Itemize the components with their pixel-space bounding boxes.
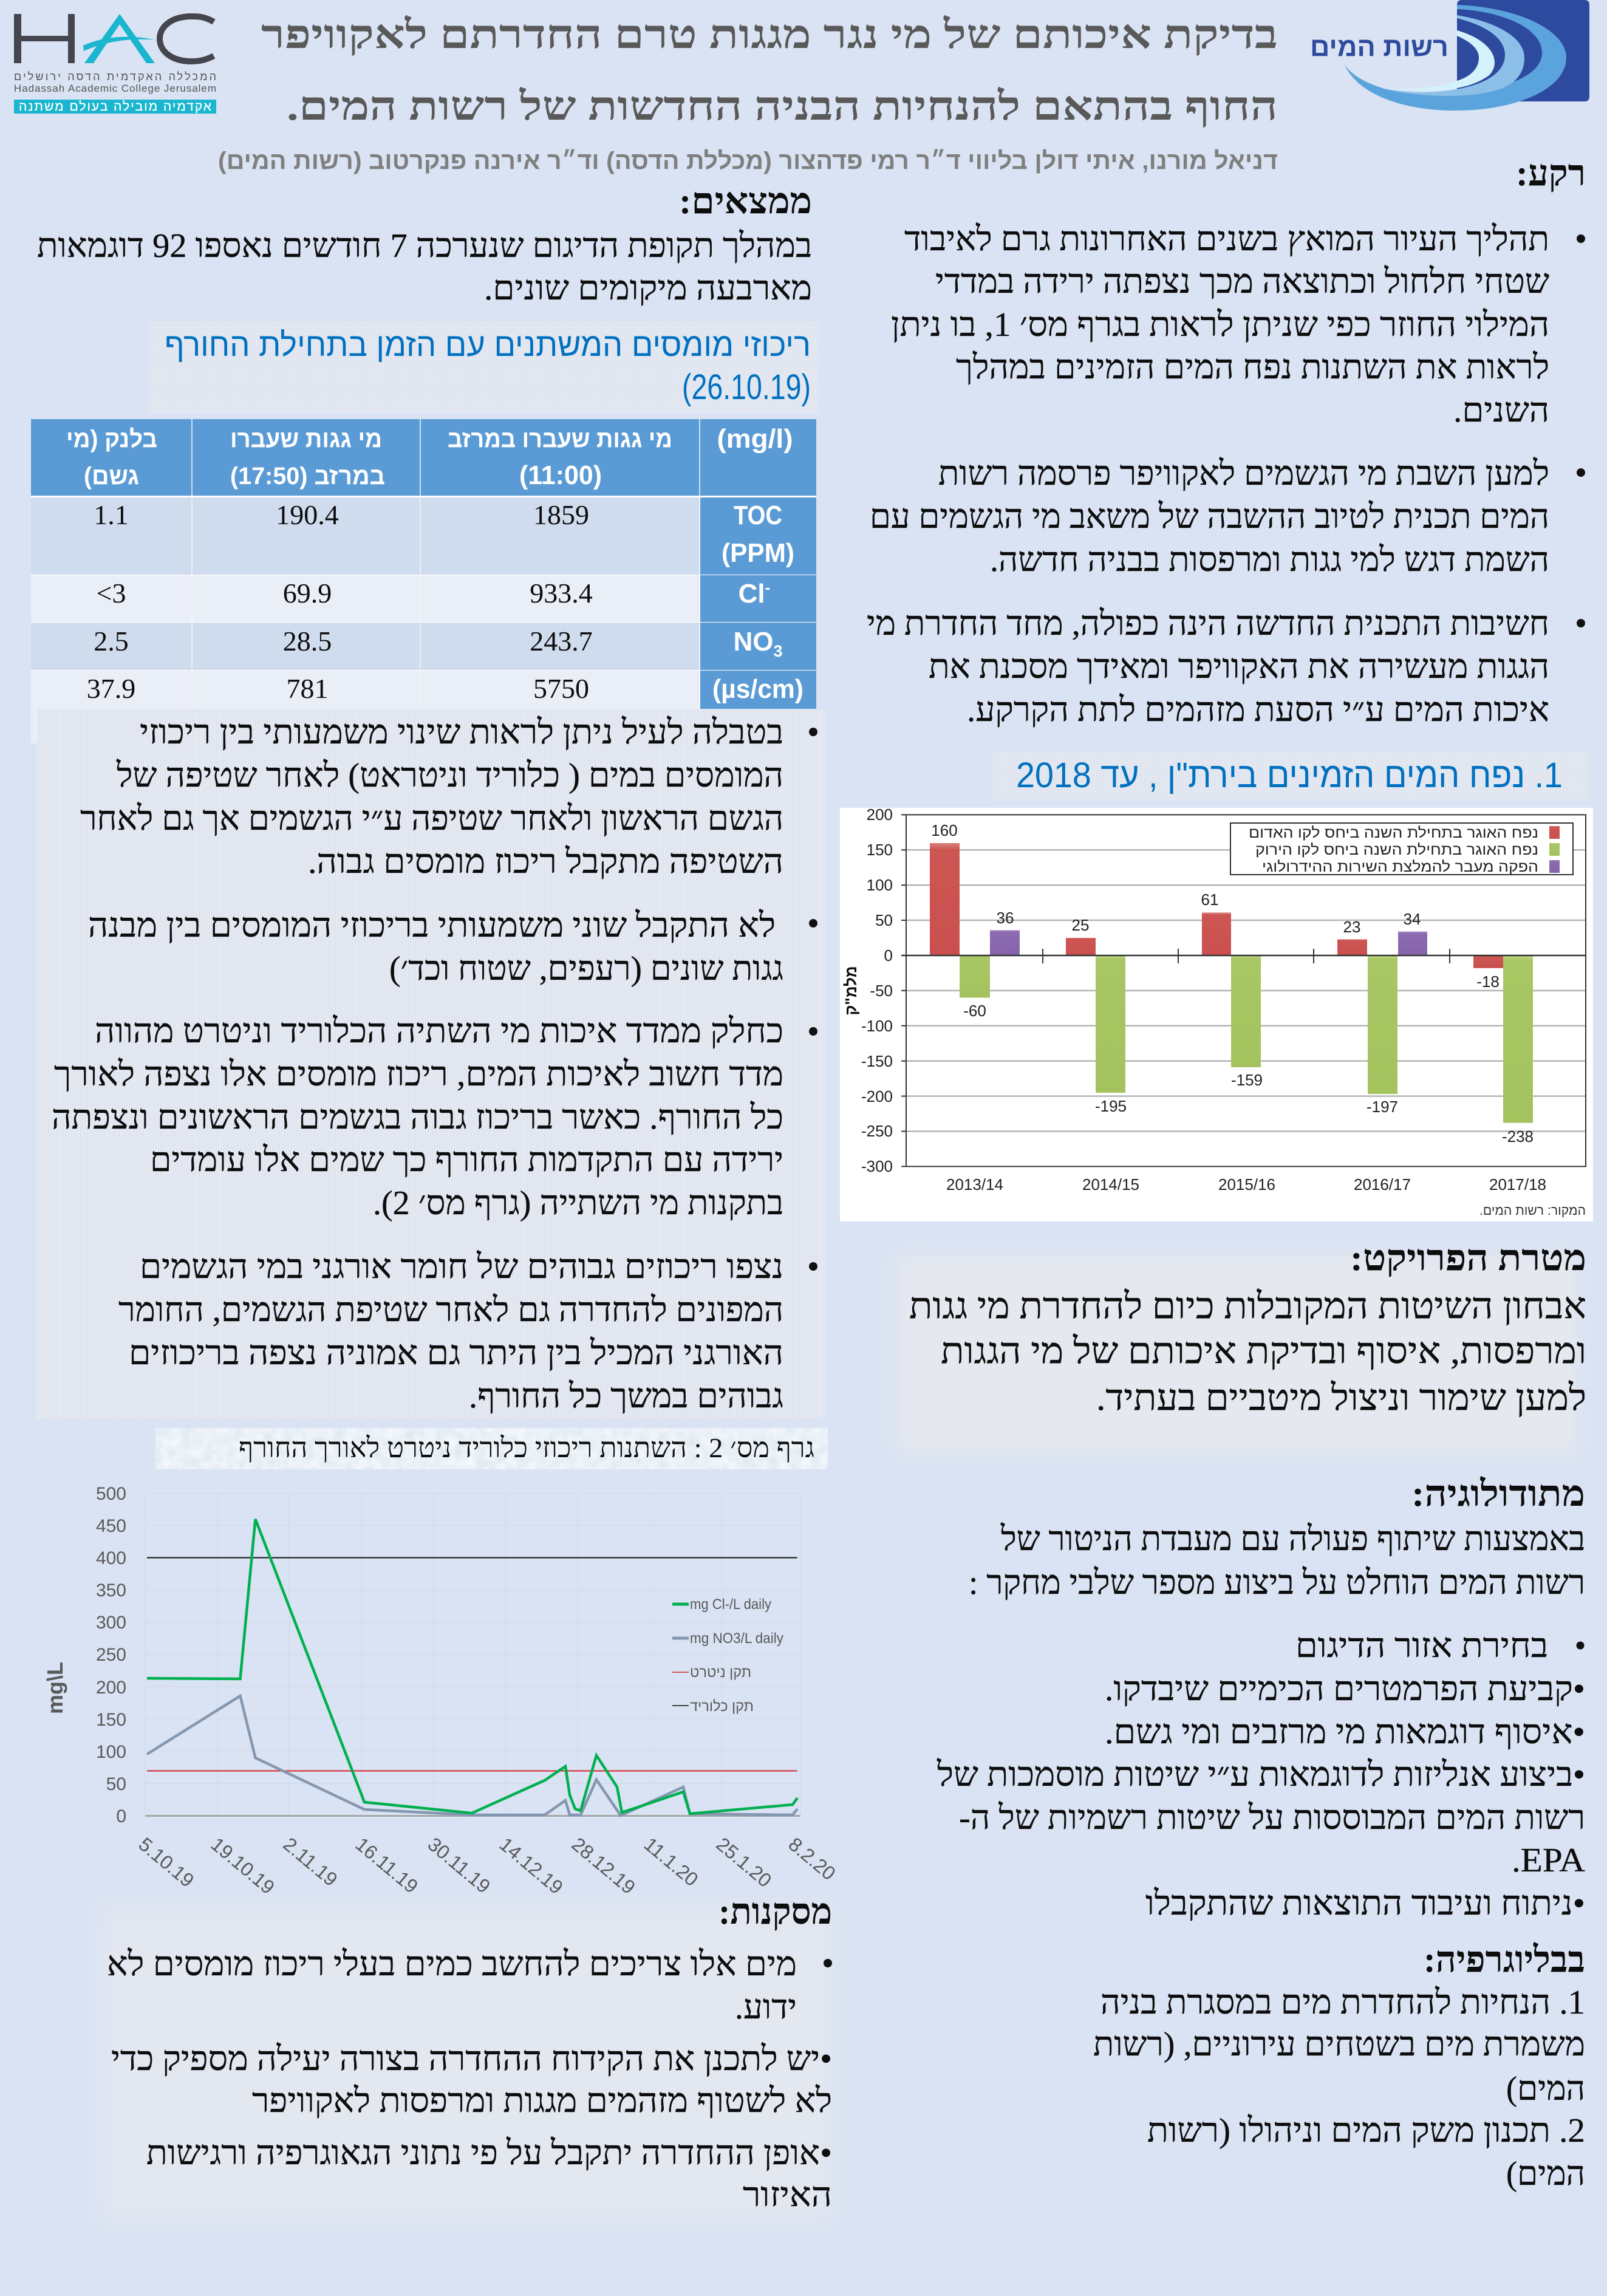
data labels [931,821,1534,1146]
bullet text 3: הגגות מעשירה את האקוויפר ומאידך מסכנת את [929,648,1549,686]
list: methodology steps [937,1627,1586,1922]
y axis labels: 100 [96,1742,126,1762]
conclusion 1 [107,1946,832,2026]
table values: 781 [287,673,328,704]
logo: HAC college: Hadassah Academic College Jerusalem [14,83,216,94]
heading: bibliography: בבליוגרפיה: [1424,1939,1585,1980]
data labels: 160 [931,821,958,839]
table header: (11:00) [519,460,602,490]
panel: chart 2 heading [155,1428,828,1469]
line: nitrate [147,1696,797,1816]
bullet text 3 [52,1013,817,1222]
data labels: 23 [1343,918,1360,936]
y axis title: מלמ"ק [842,966,860,1016]
text: findings intro: מארבעה מיקומים שונים. [484,270,812,307]
table row labels: TOC [734,501,782,530]
line: nitrate standard [147,1770,797,1771]
table header: בלנק (מי [66,426,157,453]
bullet text 2 [870,455,1585,579]
conclusion 2 [111,2040,832,2120]
y axis labels: 200 [96,1678,126,1698]
y axis labels: 450 [96,1516,126,1536]
table values: 190.4 [276,499,339,530]
legend: הפקה מעבר להמלצת השירות ההידרולוגי [1262,859,1538,875]
conclusion 3: האיזור [743,2176,832,2214]
table header: מי גגות שעברו [230,426,382,453]
category labels: 2015/16 [1218,1175,1275,1194]
bullet text 2: לא התקבל שוני משמעותי בריכוזי המומסים בין מבנה [88,907,776,945]
y axis labels: -50 [870,982,893,1000]
y axis labels: 400 [96,1548,126,1568]
logo: HAC college: המכללה האקדמית הדסה ירושלים [14,70,216,83]
y axis labels: 300 [96,1613,126,1633]
table values: 28.5 [283,626,332,657]
bullet text 4: גבוהים במשך כל החורף. [469,1378,783,1415]
bullet text 2 [88,907,817,988]
y axis labels: 150 [867,841,893,859]
panel: methodology [937,1474,1586,1922]
y axis labels: 50 [106,1774,126,1794]
x axis labels: 8.2.20 [785,1833,840,1885]
table values: 69.9 [283,578,332,609]
table values [87,499,593,704]
bullet text 2: השמת דגש למי גגות ומרפסות בבניה חדשה. [990,541,1549,579]
list: methodology steps: •קביעת הפרמטרים הכימיים שיבדקו. [1105,1670,1585,1708]
y axis labels: 250 [96,1645,126,1665]
table: dissolved concentrations [31,419,816,743]
y axis labels: 100 [867,876,893,894]
panel: findings bullets [37,709,825,1419]
bullet text 2: גגות שונים (רעפים, שטוח וכד׳) [389,950,783,988]
y axis labels: 500 [96,1484,126,1504]
list: methodology steps: •איסוף דוגמאות מי מרזבים ומי גשם. [1105,1713,1585,1751]
y axis labels: 0 [116,1806,126,1826]
text: references: 2. תכנון משק המים וניהולו (רשות [1147,2112,1585,2150]
source note: המקור: רשות המים. [1479,1203,1586,1218]
heading: project goal: מטרת הפרויקט: [1350,1238,1586,1278]
text: references: 1. הנחיות להחדרת מים במסגרת בניה [1100,1984,1585,2021]
conclusion 3: •אופן ההחדרה יתקבל על פי נתוני הגאוגרפיה ורגישות [146,2134,832,2172]
bars [930,843,1533,1123]
category labels: 2014/15 [1082,1175,1139,1194]
bullet text 3: כל החורף. כאשר בריכוז גבוה בגשמים הראשונים ונצפתה [52,1099,783,1136]
legend: תקן ניטרט [690,1664,751,1681]
conclusion 2: •יש לתכנן את הקידוח ההחדרה בצורה יעילה מספיק כדי [111,2040,832,2078]
table header: (mg/l) [717,424,793,454]
legend: נפח האוגר בתחילת השנה ביחס לקו האדום [1249,825,1538,841]
legend: נפח האוגר בתחילת השנה ביחס לקו הירוק [1255,842,1538,858]
list: methodology steps: •ביצוע אנליזות לדוגמאות ע״י שיטות מוסמכות של [937,1756,1585,1794]
table row labels [712,501,803,704]
heading: methodology: מתודולוגיה: [1411,1474,1585,1514]
legend: mg NO3/L daily [690,1630,783,1647]
panel: conclusions [100,1891,832,2221]
text: findings intro [37,227,812,307]
text: references [1093,1984,1585,2193]
legend [672,1596,783,1715]
logo: water authority: רשות המים [1310,32,1448,62]
panel: table heading: ריכוזי מומסים המשתנים עם הזמן בתחילת החורף [165,327,811,363]
y axis labels: 350 [96,1580,126,1601]
title: בדיקת איכותם של מי נגר מגגות טרם החדרתם לאקוויפר [261,13,1278,57]
data labels: -195 [1095,1097,1127,1115]
x axis labels: 30.11.19 [424,1833,494,1898]
logo: HAC college: אקדמיה מובילה בעולם משתנה [19,100,211,114]
text: project goal: אבחון השיטות המקובלות כיום להחדרת מי גגות [909,1286,1586,1326]
text: project goal [909,1286,1586,1418]
bullet text 3: מדד חשוב לאיכות המים, ריכוז מומסים אלו נצפה לאורך [54,1056,783,1093]
panel: table heading: (26.10.19) [682,367,811,407]
y axis labels: 50 [875,911,893,929]
bullet text 1: המומסים במים ( כלוריד וניטראט) לאחר שטיפה של [116,757,783,794]
panel: project goal [896,1238,1586,1453]
bullet text 4: המפונים להחדרה גם לאחר שטיפת הגשמים, החומר [118,1291,783,1329]
text: methodology intro [969,1520,1585,1602]
bullet text 1: לראות את השתנות נפח המים הזמינים במהלך [956,349,1549,386]
bullet text 1 [80,714,817,881]
category labels [946,1175,1546,1194]
text: project goal: ומרפסות, איסוף ובדיקת איכותם של מי הגגות [941,1331,1586,1371]
data labels: -238 [1502,1127,1534,1146]
x axis labels: 14.12.19 [496,1833,567,1898]
bullet text 1: השטיפה מתקבל ריכוז מומסים גבוה. [308,843,783,881]
bullet text 1: השנים. [1453,392,1549,429]
logo: HAC college [14,14,216,114]
table row labels: NO [733,627,773,657]
text: references: המים) [1506,2070,1585,2108]
title: החוף בהתאם להנחיות הבניה החדשות של רשות המים. [287,84,1278,129]
list: methodology steps: EPA. [1512,1842,1586,1879]
title [261,13,1278,129]
bullet text 1: שטחי חלחול וכתוצאה מכך נצפתה ירידה במדדי [935,263,1549,301]
heading: findings: ממצאים: [679,181,812,221]
bullet text 2: למען השבת מי הגשמים לאקוויפר פרסמה רשות [938,455,1549,493]
data labels: -197 [1366,1098,1398,1116]
y axis title: mg\L [43,1662,67,1714]
list: methodology steps: •ניתוח ועיבוד התוצאות שהתקבלו [1145,1885,1585,1922]
legend: תקן כלוריד [690,1698,754,1715]
table values: 5750 [533,673,589,704]
table values: 1859 [533,499,589,530]
data labels: 25 [1072,916,1089,934]
table row labels: Cl [739,579,765,609]
panel: table heading [149,321,819,413]
table values: 37.9 [87,673,135,704]
panel: bibliography [1093,1939,1585,2193]
y axis labels [96,1484,126,1826]
conclusion 1: ידוע. [735,1989,797,2026]
line: chloride [147,1519,797,1814]
panel: background (רקע) [867,153,1586,729]
table values: 1.1 [94,499,129,530]
text: references: המים) [1506,2155,1585,2193]
list: methodology steps: רשות המים המבוססות על שיטות רשמיות של ה- [959,1799,1585,1837]
x axis labels: 19.10.19 [207,1833,279,1898]
legend [1230,823,1573,875]
table values: 243.7 [530,626,593,657]
table header [66,424,793,490]
bullet text 3 [867,605,1585,729]
x axis labels: 25.1.20 [712,1833,776,1891]
heading: background: רקע: [1516,153,1586,193]
y axis labels: -250 [861,1122,893,1140]
table header: גשם) [84,463,139,490]
panel: chart 1 heading: 1. נפח המים הזמינים בירת"ן , עד 2018 [1016,756,1563,795]
table values: <3 [97,578,126,609]
y axis labels [861,805,893,1175]
category labels: 2017/18 [1489,1175,1546,1194]
bullet text 2: המים תכנית לטיוב ההשבה של משאב מי הגשמים עם [870,498,1549,536]
x axis labels: 16.11.19 [352,1833,422,1898]
bullet text 3: חשיבות התכנית החדשה הינה כפולה, מחד החדרת מי [867,605,1549,643]
bar chart: available water volume [840,805,1593,1221]
y axis labels: 200 [867,805,893,824]
category labels: 2016/17 [1354,1175,1411,1194]
conclusion 2: לא לשטוף מזהמים מגגות ומרפסות לאקוויפר [252,2082,832,2120]
conclusion 1: מים אלו צריכים להחשב כמים בעלי ריכוז מומסים לא [107,1946,797,1983]
table row labels: (PPM) [722,538,794,568]
bullet text 4: האורגני המכיל בין היתר גם אמוניה נצפה בריכוזים [129,1334,783,1372]
table values: 933.4 [530,578,593,609]
bullet text 3: איכות המים ע״י הסעת מזהמים לתת הקרקע. [967,691,1549,729]
table header: במרזב (17:50) [230,463,385,490]
text: project goal: למען שימור וניצול מיטביים בעתיד. [1096,1378,1586,1418]
x axis labels: 28.12.19 [568,1833,640,1898]
bullet text 3: בתקנות מי השתייה (גרף מס׳ 2). [373,1184,783,1222]
heading: conclusions: מסקנות: [718,1891,832,1932]
data labels: 61 [1201,890,1218,909]
table header: מי גגות שעברו במרזב [448,426,672,453]
table values: 2.5 [94,626,129,657]
bullet text 1: הגשם הראשון ולאחר שטיפה ע״י הגשמים אך גם לאחר [80,800,783,838]
panel: chart 2 heading: גרף מס׳ 2 : השתנות ריכוזי כלוריד ניטרט לאורך החורף [239,1432,814,1463]
y axis labels: -200 [861,1087,893,1105]
y axis labels: -150 [861,1052,893,1070]
conclusion 3 [146,2134,832,2214]
bullet text 3: ירידה עם התקדמות החורף כך שמים אלו עומדים [150,1141,783,1179]
legend: mg Cl-/L daily [690,1596,771,1613]
authors: דניאל מורנו, איתי דולן בליווי ד״ר רמי פדהצור (מכללת הדסה) וד״ר אירנה פנקרטוב (רשות המים) [218,148,1278,174]
x axis labels [135,1833,840,1898]
text: references: משמרת מים בשטחים עירוניים, (רשות [1093,2026,1585,2063]
text: methodology intro: באמצעות שיתוף פעולה עם מעבדת הניטור של [1000,1520,1585,1558]
bullet text 1: בטבלה לעיל ניתן לראות שינוי משמעותי בין ריכוזי [140,714,783,751]
bullet text 4: נצפו ריכוזים גבוהים של חומר אורגני במי הגשמים [140,1248,783,1286]
y axis labels: 0 [884,946,893,965]
y axis labels: -100 [861,1017,893,1035]
x axis labels: 2.11.19 [279,1833,342,1890]
table row labels: 3 [773,642,783,660]
text: methodology intro: רשות המים הוחלט על ביצוע מספר שלבי מחקר : [969,1564,1585,1602]
data labels: -18 [1476,972,1500,991]
x axis labels: 11.1.20 [640,1833,703,1890]
bullet text 3: כחלק ממדד איכות מי השתיה הכלוריד וניטרט מהווה [95,1013,783,1050]
y axis labels: 150 [96,1710,126,1730]
bullet text 1 [891,220,1585,429]
data labels: 34 [1404,910,1421,928]
bullet text 1: תהליך העיור המואץ בשנים האחרונות גרם לאיבוד [904,220,1549,258]
panel: findings intro [37,181,812,307]
list: methodology steps: בחירת אזור הדיגום [1295,1627,1548,1665]
table row labels: (µs/cm) [712,674,803,704]
table row labels: - [765,578,770,596]
y axis labels: -300 [861,1157,893,1175]
bullet text 4 [118,1248,817,1415]
data labels: -159 [1231,1071,1263,1089]
data labels: -60 [963,1002,986,1020]
data labels: 36 [997,909,1014,927]
category labels: 2013/14 [946,1175,1003,1194]
logo: water authority [1310,0,1589,111]
bullet text 1: המילוי החוזר כפי שניתן לראות בגרף מס׳ 1, בו ניתן [891,306,1549,344]
text: findings intro: במהלך תקופת הדיגום שנערכה 7 חודשים נאספו 92 דוגמאות [37,227,812,265]
x axis labels: 5.10.19 [135,1833,198,1891]
line: chloride standard [147,1557,797,1559]
line chart: chloride and nitrate over winter [43,1484,840,1898]
